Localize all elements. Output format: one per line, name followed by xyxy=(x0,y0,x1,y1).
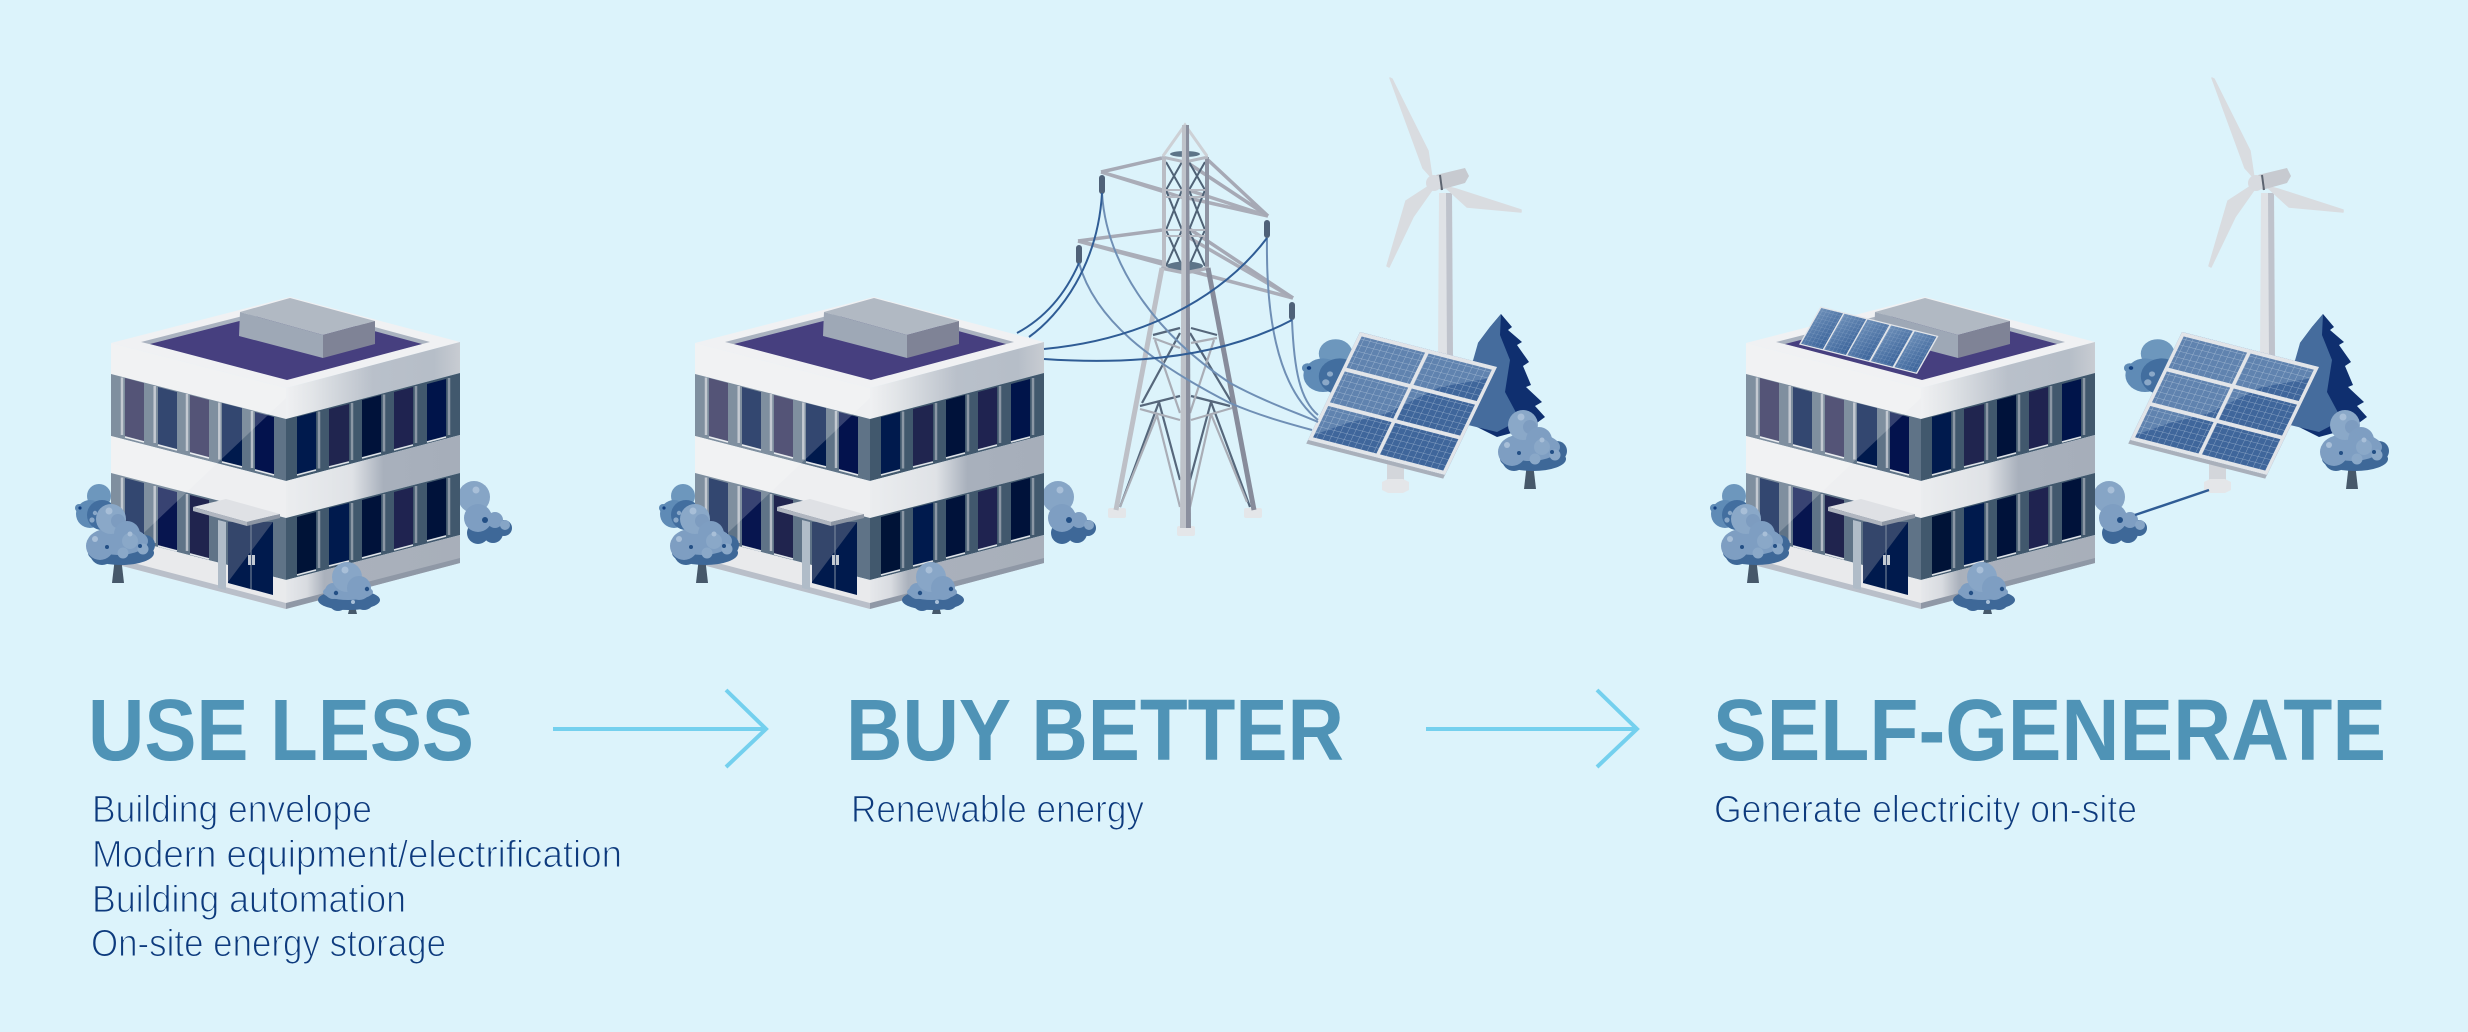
insulators xyxy=(1076,175,1295,320)
list: use less: Building automation xyxy=(92,879,406,921)
facade walls xyxy=(111,342,460,609)
rooftop solar array xyxy=(1799,306,1938,374)
lower bracing dark xyxy=(1120,328,1250,507)
bush front xyxy=(318,562,380,614)
entrance canopy xyxy=(193,499,280,526)
connection line from panel to building xyxy=(2135,490,2209,515)
pine tree: buy better xyxy=(1466,314,1545,437)
arrow: use less to buy better xyxy=(553,690,766,767)
list: use less: Building envelope xyxy=(92,789,372,831)
base building xyxy=(1710,297,2147,614)
text: self-generate: Generate electricity on-site xyxy=(1714,789,2137,831)
pine tree: self-generate xyxy=(2288,314,2367,437)
transmission tower xyxy=(1076,125,1295,536)
rooftop unit xyxy=(239,298,375,358)
heading: self-generate: SELF-GENERATE xyxy=(1713,682,2386,779)
building: use less xyxy=(75,297,512,614)
roof xyxy=(111,297,460,388)
list: use less: Modern equipment/electrification xyxy=(92,834,622,876)
solar panel: self-generate xyxy=(2128,332,2319,493)
lower bracing light xyxy=(1120,338,1247,507)
mast lattice xyxy=(1166,162,1205,266)
tree front left xyxy=(86,504,155,583)
list: use less: On-site energy storage xyxy=(91,923,446,965)
light reflection on left face xyxy=(111,343,286,564)
tower feet xyxy=(1108,508,1262,536)
mast frame xyxy=(1162,157,1166,269)
tower legs xyxy=(1116,268,1162,510)
text: buy better: Renewable energy xyxy=(851,789,1144,831)
grid lines to building xyxy=(1017,193,1292,361)
heading: buy better: BUY BETTER xyxy=(846,682,1344,779)
wind turbine: self-generate xyxy=(2209,78,2343,360)
windows left face xyxy=(122,378,274,559)
tree behind building left xyxy=(75,484,117,530)
solar panel: buy better xyxy=(1306,332,1497,493)
near-side arms xyxy=(1078,158,1293,298)
renewable feed lines xyxy=(1079,193,1318,430)
spire xyxy=(1163,125,1207,160)
heading: use less: USE LESS xyxy=(88,682,474,779)
bush behind solar panel: self-generate xyxy=(2124,339,2183,394)
wind turbine: buy better xyxy=(1387,78,1521,360)
platforms xyxy=(1170,151,1200,157)
building: buy better xyxy=(659,297,1096,614)
far-side arms xyxy=(1078,172,1293,298)
building: self-generate xyxy=(1710,297,2147,614)
windows right face xyxy=(297,378,449,575)
bush behind solar panel: buy better xyxy=(1302,339,1361,394)
list: use less xyxy=(91,789,622,965)
power lines xyxy=(1017,193,1318,430)
entrance door xyxy=(218,520,273,595)
bush behind building right xyxy=(458,481,512,544)
tree front of solar panel: self-generate xyxy=(2320,410,2389,489)
tree front of solar panel: buy better xyxy=(1498,410,1567,489)
arrow: buy better to self-generate xyxy=(1426,690,1637,767)
